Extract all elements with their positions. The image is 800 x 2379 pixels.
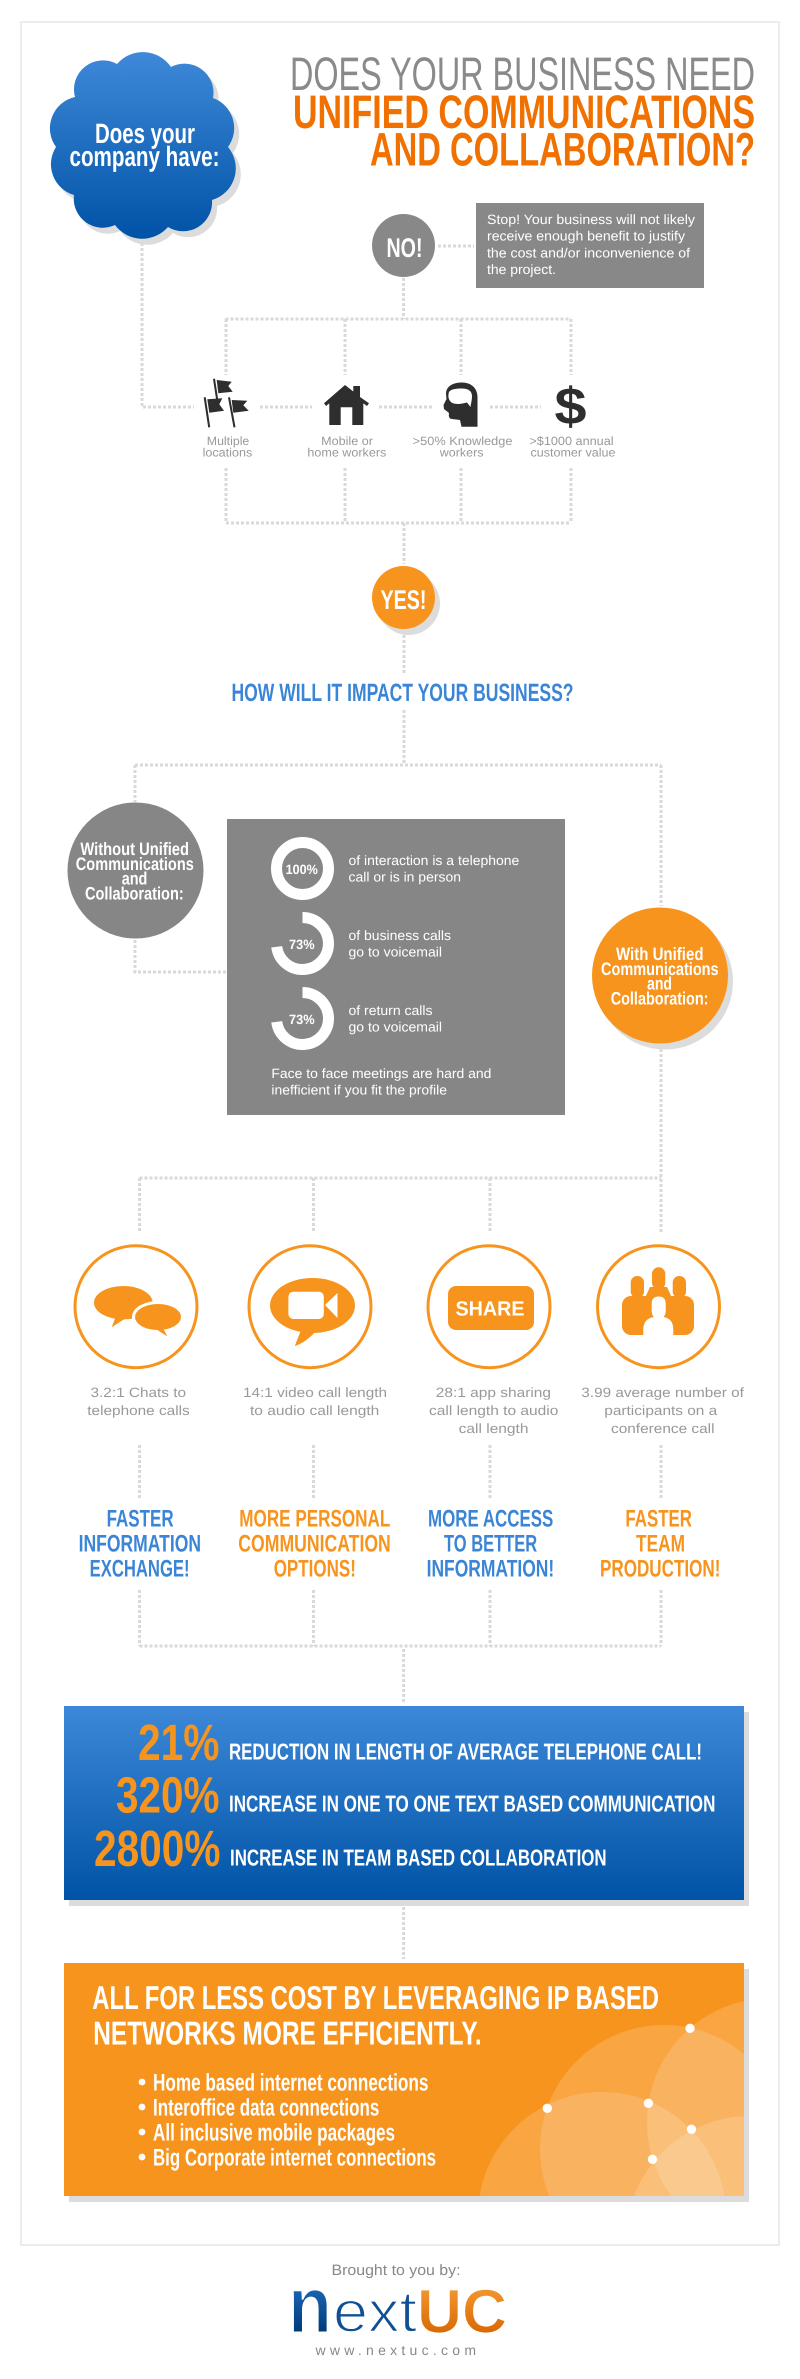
connector: branch split — [135, 765, 661, 1233]
benefit: faster team production: TEAM — [636, 1531, 685, 1558]
caption: customer value: customer value — [530, 446, 616, 460]
caption: chats — [87, 1385, 190, 1418]
text: face to face: Face to face meetings are hard and — [271, 1066, 491, 1081]
badge: without UC: Communications — [76, 854, 194, 874]
caption: conference: conference call — [611, 1421, 714, 1436]
benefit: more personal options: COMMUNICATION — [238, 1531, 391, 1558]
text: business calls: go to voicemail — [348, 945, 442, 960]
logo: NextUC: n — [288, 2261, 332, 2350]
caption: app sharing: call length — [459, 1421, 528, 1436]
panel: results: 320% — [116, 1766, 220, 1823]
text: return calls: of return calls — [348, 1003, 433, 1018]
bullet list: Big Corporate internet connections — [153, 2145, 436, 2172]
stop callout — [476, 203, 704, 288]
icon: video call — [249, 1246, 371, 1368]
captions: ratios — [87, 1385, 744, 1436]
bullet list: Interoffice data connections — [153, 2095, 379, 2122]
logo: NextUC: UC — [417, 2278, 507, 2346]
NO badge: NO! — [386, 233, 422, 263]
caption: mobile or home workers — [307, 434, 386, 460]
YES badge — [372, 566, 440, 635]
caption: video — [243, 1385, 387, 1418]
NO badge — [372, 214, 435, 277]
criteria icons row — [203, 378, 616, 460]
cloud: does your company have: company have: — [70, 141, 220, 172]
footer: website: www.nextuc.com — [314, 2342, 476, 2358]
caption: mobile or home workers: Mobile or — [321, 434, 373, 448]
donut: 73 percent business calls: 73% — [289, 937, 315, 952]
badge: with UC: and — [647, 974, 672, 994]
badge: with UC: With Unified — [616, 944, 704, 964]
cloud: does your company have: Does your — [95, 118, 195, 149]
badge: with UC: Collaboration: — [611, 988, 708, 1008]
donut: 73 percent return calls: 73% — [289, 1012, 315, 1027]
panel: results: 2800% — [94, 1820, 220, 1877]
stop callout: the cost and/or inconvenience of — [487, 245, 690, 260]
connector: decision flow top — [142, 243, 571, 765]
icon: share — [428, 1246, 550, 1368]
caption: multiple locations: Multiple — [207, 434, 250, 448]
text: face to face — [271, 1066, 491, 1098]
network circles — [480, 2001, 744, 2196]
stop callout: the project. — [487, 262, 556, 277]
badge: with UC: Communications — [601, 959, 719, 979]
footer: brought to you by: Brought to you by: — [332, 2262, 460, 2279]
stop callout: receive enough benefit to justify — [487, 229, 685, 244]
benefit: more access to information: INFORMATION! — [427, 1556, 554, 1583]
badge: without UC — [68, 802, 204, 938]
icon: chat bubbles — [75, 1246, 197, 1368]
benefit: faster team production: PRODUCTION! — [600, 1556, 720, 1583]
benefit: faster information exchange: INFORMATION — [79, 1531, 201, 1558]
icon: house — [324, 385, 369, 425]
donut: 100 percent: 100% — [286, 862, 318, 877]
text: interaction: of interaction is a telephone — [348, 853, 519, 868]
bullet list: All inclusive mobile packages — [153, 2120, 395, 2147]
icon: team — [598, 1246, 720, 1368]
heading: less cost: NETWORKS MORE EFFICIENTLY. — [93, 2014, 482, 2051]
text: return calls — [348, 1003, 442, 1035]
caption: video: to audio call length — [250, 1403, 379, 1418]
donut: 73 percent business calls — [277, 918, 328, 970]
icon: flags — [204, 379, 249, 428]
title — [290, 47, 755, 176]
caption: multiple locations — [203, 434, 252, 460]
YES badge: YES! — [380, 585, 426, 615]
caption: app sharing — [429, 1385, 558, 1436]
logo: NextUC — [288, 2261, 507, 2350]
caption: chats: telephone calls — [87, 1403, 190, 1418]
benefit: more access to information — [427, 1506, 554, 1583]
logo: NextUC: ext — [333, 2280, 417, 2345]
panel: results — [64, 1706, 749, 1906]
benefit: more personal options: OPTIONS! — [274, 1556, 356, 1583]
benefit: more personal options: MORE PERSONAL — [239, 1506, 390, 1533]
caption: video: 14:1 video call length — [243, 1385, 387, 1400]
caption: customer value — [529, 434, 616, 460]
benefit: faster information exchange: FASTER — [107, 1506, 174, 1533]
text: return calls: go to voicemail — [348, 1020, 442, 1035]
badge: without UC: Without Unified — [80, 839, 189, 859]
bullet list: Home based internet connections — [153, 2070, 428, 2097]
heading: how will it impact: HOW WILL IT IMPACT YOUR BUSINESS? — [232, 679, 574, 707]
caption: mobile or home workers: home workers — [307, 446, 386, 460]
panel: results: 21% — [138, 1714, 220, 1771]
caption: app sharing: 28:1 app sharing — [436, 1385, 551, 1400]
benefit: more access to information: MORE ACCESS — [428, 1506, 553, 1533]
icon: dollar sign: $ — [554, 378, 587, 436]
caption: knowledge workers — [413, 434, 513, 460]
caption: knowledge workers: workers — [439, 446, 484, 460]
cloud: does your company have — [50, 52, 241, 245]
badge: with UC — [592, 908, 733, 1050]
stop callout: Stop! Your business will not likely — [487, 212, 695, 227]
benefit: faster information exchange: EXCHANGE! — [90, 1556, 190, 1583]
caption: chats: 3.2:1 Chats to — [90, 1385, 186, 1400]
benefit: faster information exchange — [79, 1506, 201, 1583]
benefit: more access to information: TO BETTER — [444, 1531, 537, 1558]
text: business calls — [348, 928, 451, 960]
text: face to face: inefficient if you fit the profile — [271, 1083, 447, 1098]
caption: conference: 3.99 average number of — [581, 1385, 744, 1400]
text: interaction: call or is in person — [348, 870, 461, 885]
caption: knowledge workers: >50% Knowledge — [413, 434, 513, 448]
icon: share: SHARE — [456, 1298, 524, 1321]
text: interaction — [348, 853, 519, 885]
caption: conference: participants on a — [604, 1403, 718, 1418]
icon: head with brain — [444, 382, 478, 427]
caption: app sharing: call length to audio — [429, 1403, 558, 1418]
badge: without UC: and — [122, 869, 147, 889]
panel: less cost — [64, 1963, 749, 2202]
donut: 100 percent — [276, 842, 328, 894]
benefit: faster team production: FASTER — [625, 1506, 692, 1533]
connector: results to cost — [402, 1907, 405, 1959]
caption: multiple locations: locations — [203, 446, 252, 460]
benefit: faster team production — [600, 1506, 720, 1583]
caption: customer value: >$1000 annual — [529, 434, 614, 448]
donut: 73 percent return calls — [277, 992, 328, 1044]
panel: without UC statistics — [227, 819, 565, 1115]
connector: benefits — [140, 1445, 661, 1702]
benefit: more personal options — [238, 1506, 391, 1583]
caption: conference — [581, 1385, 744, 1436]
panel: results: INCREASE IN TEAM BASED COLLABORATION — [230, 1844, 607, 1870]
badge: without UC: Collaboration: — [85, 883, 184, 903]
bullet list — [139, 2070, 436, 2172]
heading: less cost — [92, 1979, 659, 2051]
text: business calls: of business calls — [348, 928, 451, 943]
